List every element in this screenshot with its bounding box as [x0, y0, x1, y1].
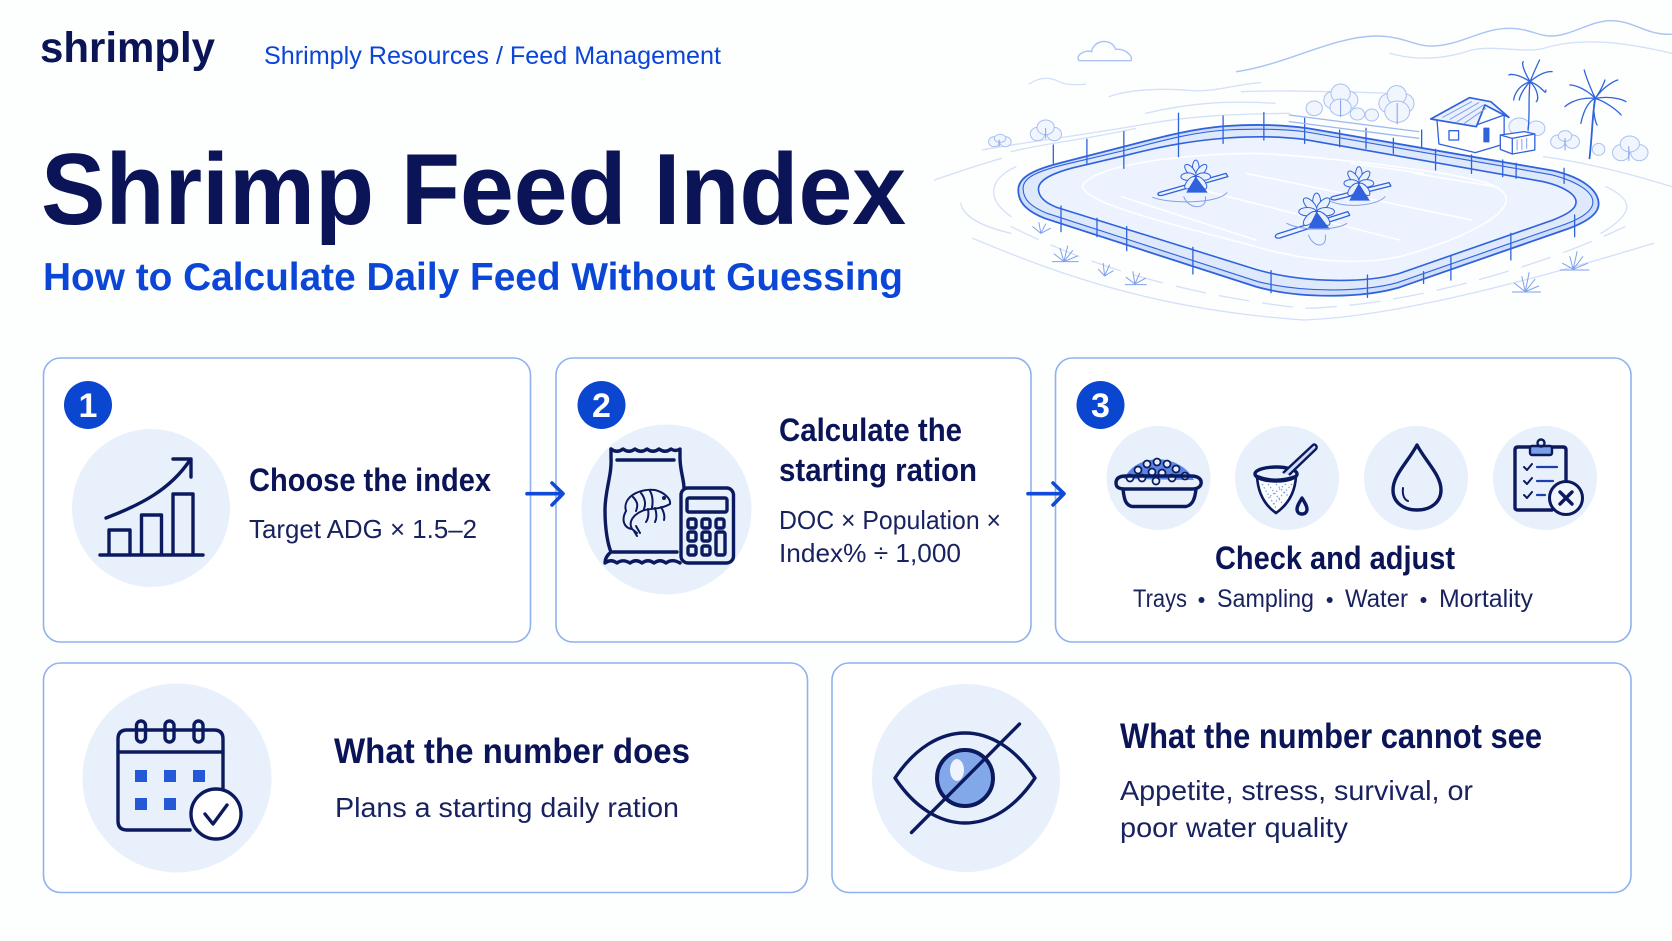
checks list: Trays [1133, 585, 1187, 613]
badge 2: 2 [592, 387, 611, 425]
checks list [1133, 585, 1533, 613]
checks list: Mortality [1439, 585, 1533, 613]
formula: Target ADG × 1.5–2 [249, 514, 477, 544]
farm house [1431, 98, 1535, 154]
icon: mortality checklist [1493, 426, 1597, 530]
icon: crossed-out eye [872, 684, 1060, 872]
badge 3 [1076, 381, 1124, 429]
aerator 3 [1275, 193, 1350, 245]
arrow: step 1 to step 2 [527, 483, 563, 505]
fence posts [1053, 113, 1575, 297]
arrow: step 2 to step 3 [1028, 483, 1064, 505]
icon: feed bag and calculator [582, 424, 752, 594]
heading: Choose the index [249, 462, 491, 498]
description: Plans a starting daily ration [335, 792, 679, 823]
cloud [1078, 41, 1131, 61]
description [1120, 775, 1473, 843]
icon: calendar with check [82, 684, 272, 872]
badge 1 [64, 381, 112, 429]
heading: What the number does [334, 732, 690, 771]
heading [779, 412, 977, 488]
panel: step 2 calculate the starting ration [556, 358, 1031, 642]
icon: sampling net [1235, 426, 1339, 530]
panel: what the number does [44, 663, 808, 892]
breadcrumb: Shrimply Resources / Feed Management [264, 42, 721, 70]
water ripples [1083, 153, 1506, 261]
trees [989, 84, 1648, 161]
aerator 1 [1153, 160, 1228, 207]
subtitle: How to Calculate Daily Feed Without Guessing [43, 256, 903, 299]
description: Appetite, stress, survival, or [1120, 775, 1473, 806]
formula [779, 505, 1001, 568]
background hills and ground lines [934, 21, 1672, 320]
badge 2 [578, 381, 626, 429]
badge 3: 3 [1091, 387, 1110, 425]
description: poor water quality [1120, 812, 1348, 843]
shrubs and grass [1033, 223, 1589, 292]
aerators [1153, 160, 1391, 245]
formula: Index% ÷ 1,000 [779, 538, 961, 568]
heading: starting ration [779, 452, 977, 488]
icon: feed tray [1106, 426, 1210, 530]
heading: What the number cannot see [1120, 717, 1542, 756]
aerator 2 [1328, 167, 1391, 205]
icon: water drop [1364, 426, 1468, 530]
logo: shrimply: shrimply [40, 24, 215, 72]
checks list: Water [1345, 585, 1408, 613]
palm trees [1509, 60, 1626, 158]
panel: step 1 choose the index [44, 358, 530, 642]
panel: what the number cannot see [832, 663, 1631, 892]
pond bank and water [1018, 125, 1599, 296]
illustration: shrimp pond [934, 21, 1672, 320]
icon: growth chart [72, 429, 230, 587]
checks list: Sampling [1217, 585, 1314, 613]
title: Shrimp Feed Index [41, 134, 906, 246]
formula: DOC × Population × [779, 505, 1001, 535]
panel: step 3 check and adjust [1056, 358, 1631, 642]
badge 1: 1 [79, 387, 97, 425]
icon: shrimp [624, 490, 670, 536]
heading: Check and adjust [1215, 540, 1455, 576]
heading: Calculate the [779, 412, 962, 448]
